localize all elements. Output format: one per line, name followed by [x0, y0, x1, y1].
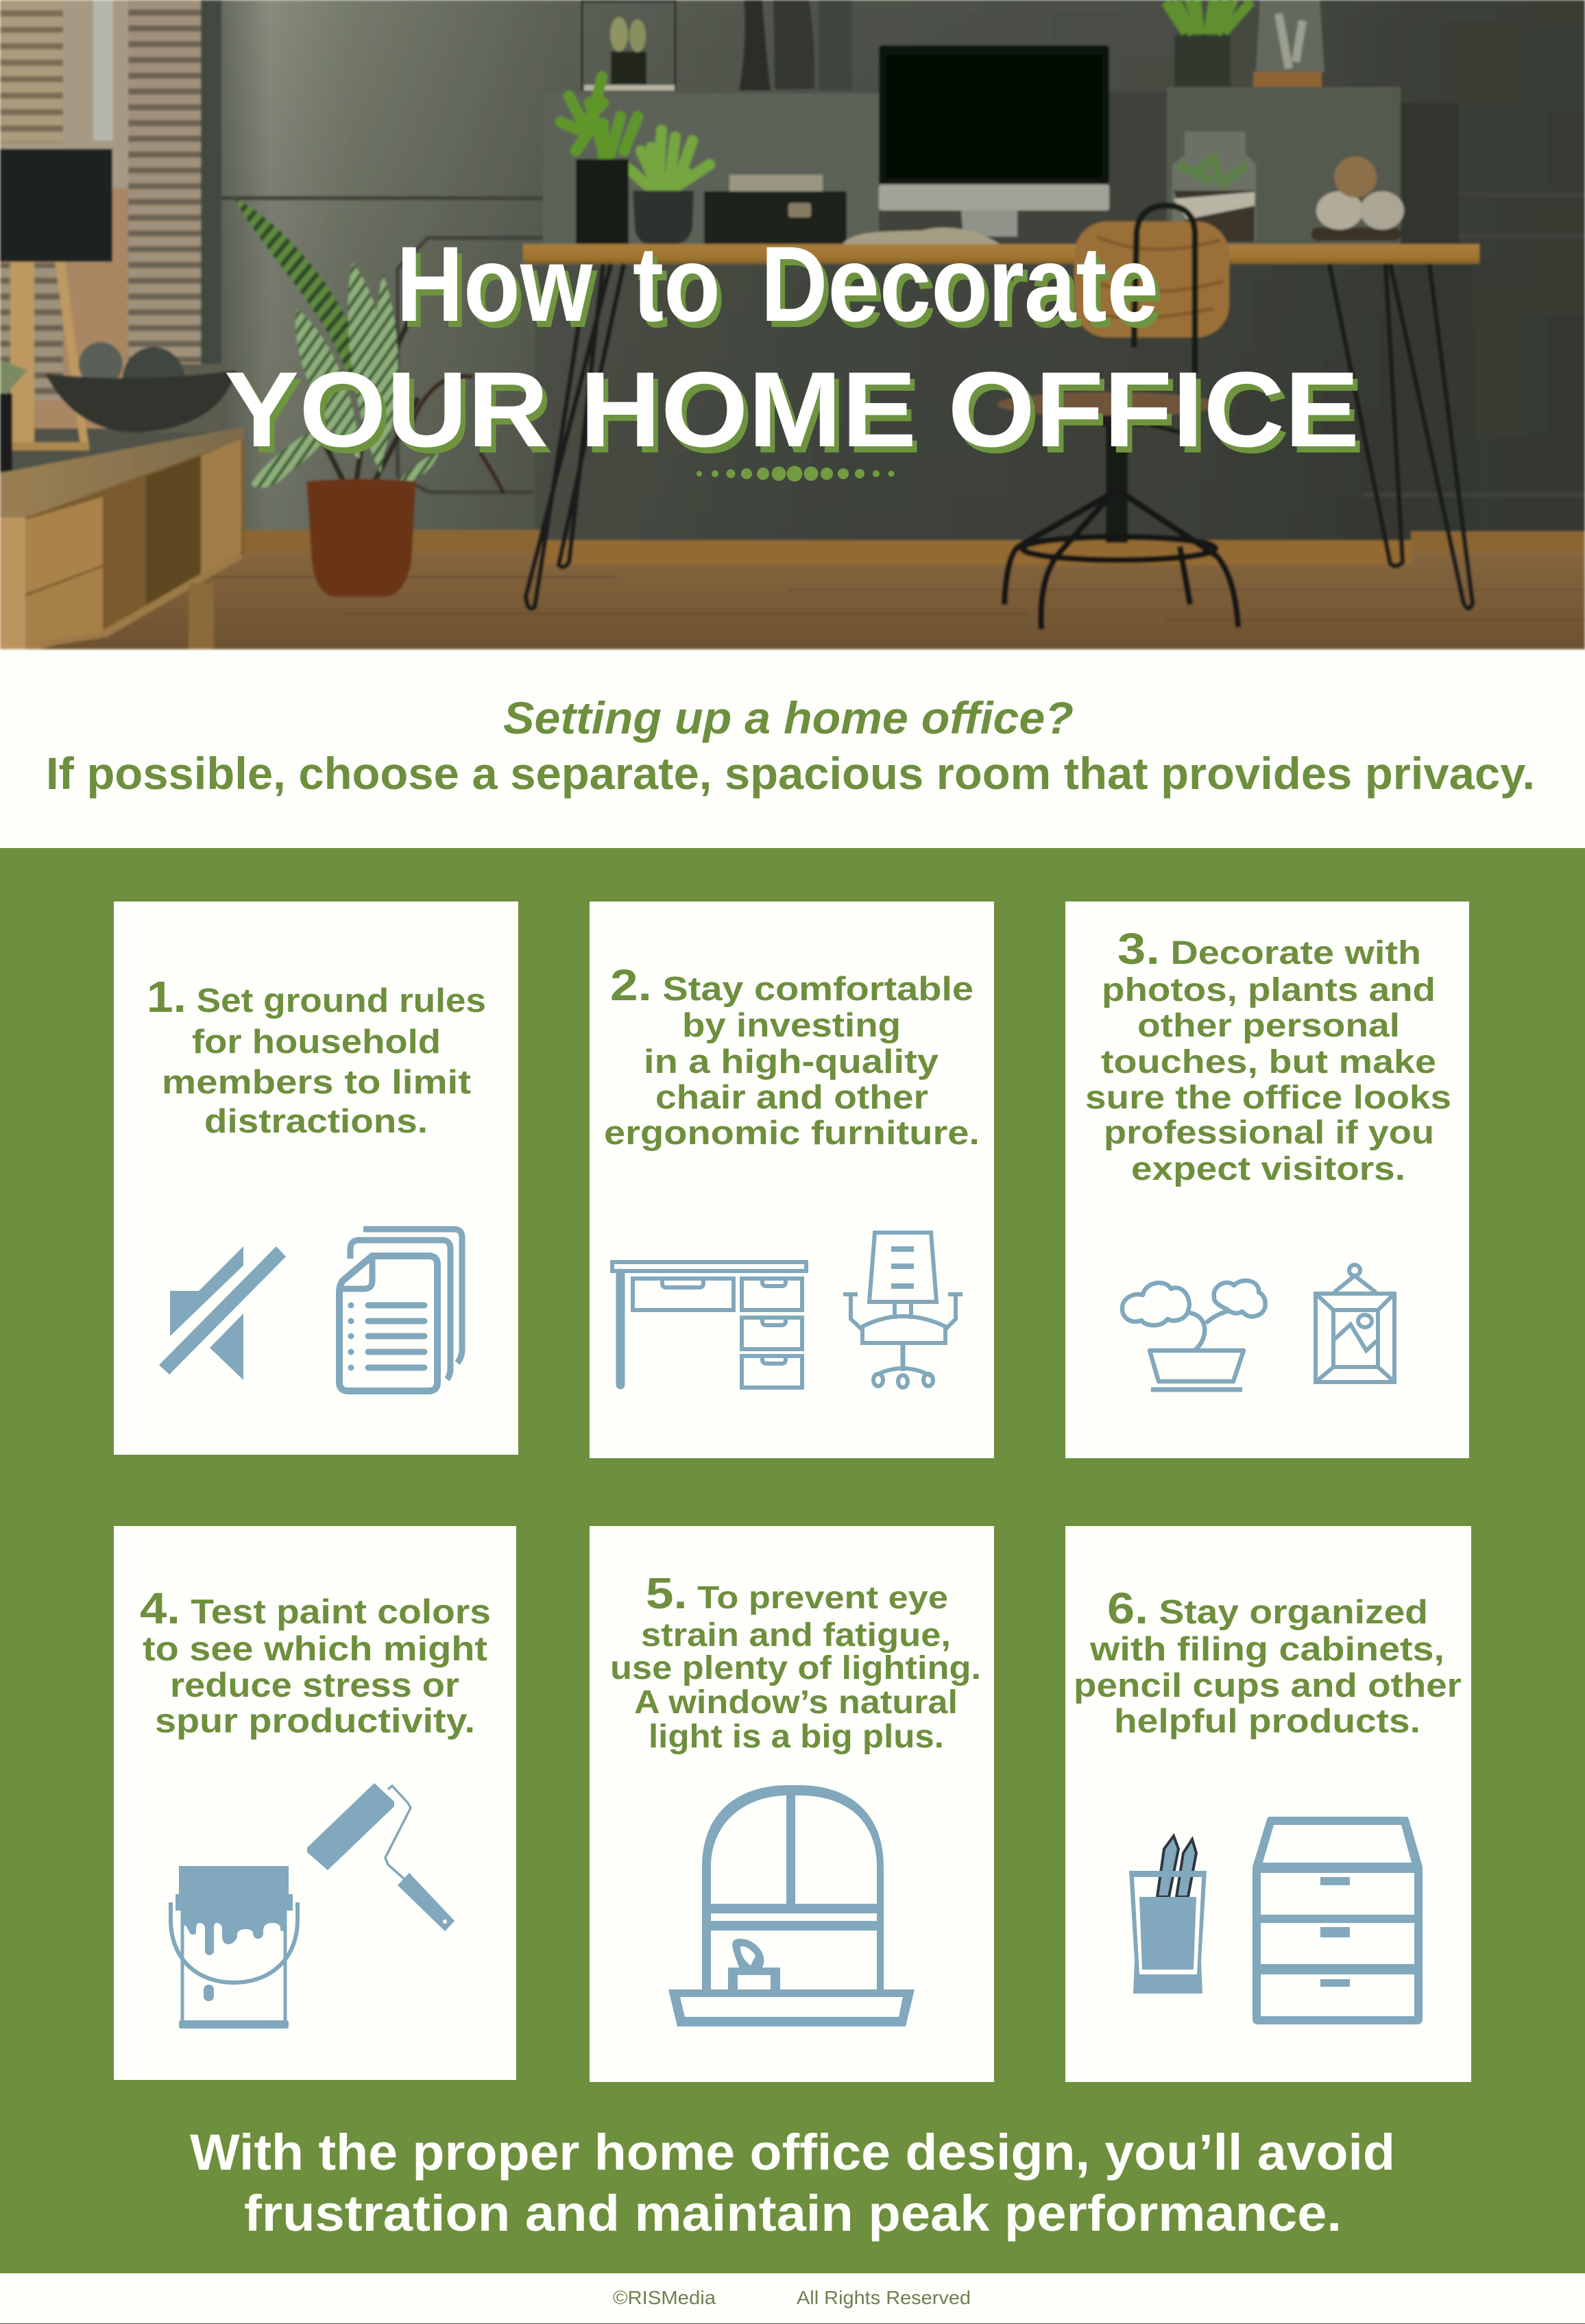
card 1: ground rules [114, 901, 518, 1455]
card 4 text: 4. Test paint colors [140, 1584, 491, 1633]
card 1 text: distractions. [204, 1103, 428, 1140]
card 4: paint colors [114, 1526, 516, 2080]
icon: paint can [171, 1866, 298, 2029]
card 5 text: A window’s natural [634, 1684, 958, 1721]
wooden sideboard [0, 426, 244, 649]
closing statement: frustration and maintain peak performance. [244, 2185, 1342, 2242]
card 5 text [610, 1569, 981, 1755]
card 4 text [140, 1584, 491, 1740]
title line one shadow: How to Decorate [401, 231, 1163, 350]
card 6 text: pencil cups and other [1074, 1667, 1462, 1704]
icon: paint roller [307, 1783, 455, 1931]
card 6: organization [1065, 1526, 1471, 2082]
floor plant terracotta pot [306, 479, 416, 597]
footer credits: ©RISMedia [613, 2287, 716, 2308]
footer credits [613, 2287, 971, 2308]
closing statement [190, 2124, 1395, 2242]
desk top [523, 244, 1479, 264]
wire basket with balls [0, 342, 237, 472]
hero photo: home office desk scene [0, 0, 1585, 649]
intro heading: Setting up a home office? [503, 692, 1074, 743]
card 3 text: photos, plants and [1102, 972, 1436, 1008]
wall mouldings [201, 195, 1585, 495]
card 3: personal touches [1065, 901, 1469, 1458]
floor and baseboards [0, 530, 1585, 649]
card 6 text: helpful products. [1114, 1703, 1420, 1740]
card 2 text: ergonomic furniture. [604, 1115, 980, 1152]
card 2 text [604, 960, 980, 1152]
icon: pencil cup [1129, 1836, 1207, 1994]
card 3 text: other personal [1137, 1008, 1400, 1044]
card 5: lighting [590, 1526, 994, 2082]
icon: bonsai tree [1122, 1281, 1266, 1390]
card 4 text: spur productivity. [155, 1702, 475, 1740]
card 3 text: sure the office looks [1085, 1080, 1451, 1116]
footer credits: All Rights Reserved [797, 2287, 971, 2308]
desk plants and pots [561, 77, 847, 244]
icon: filing cabinet [1253, 1817, 1423, 2024]
icon: office chair [843, 1233, 963, 1388]
intro sentence: If possible, choose a separate, spacious room that provides privacy. [46, 748, 1535, 799]
card 2 text: chair and other [655, 1079, 928, 1116]
card 3 text: touches, but make [1101, 1044, 1436, 1080]
card 3 text: expect visitors. [1131, 1151, 1405, 1187]
card 2 text: in a high-quality [644, 1043, 939, 1080]
icon: muted speaker [159, 1246, 286, 1380]
card 1 text: members to limit [162, 1064, 471, 1101]
card 3 text: professional if you [1104, 1115, 1434, 1151]
floor plant with leaves [233, 197, 504, 494]
card 5 text: light is a big plus. [649, 1719, 944, 1755]
card 5 text: use plenty of lighting. [610, 1650, 981, 1686]
jar and decorative balls [1172, 132, 1404, 242]
card 4 text: to see which might [143, 1630, 487, 1668]
card 5 text: strain and fatigue, [641, 1617, 951, 1654]
green tips section background [0, 848, 1585, 2273]
card 6 text [1074, 1584, 1462, 1740]
icon: desk with drawers [612, 1262, 806, 1388]
card 1 text [147, 972, 486, 1140]
table lamp [0, 149, 112, 450]
title line one: How to Decorate [396, 225, 1159, 344]
card 1 text: 1. Set ground rules [147, 972, 486, 1021]
top shelf decor [582, 0, 1324, 90]
computer monitor [842, 45, 1109, 245]
title: How to Decorate Your Home Office [224, 225, 1364, 476]
wall [0, 0, 1585, 569]
decorative dotted divider [697, 466, 894, 481]
card 5 text: 5. To prevent eye [646, 1569, 948, 1618]
title line two: YOUR HOME OFFICE [224, 350, 1359, 470]
card 2 text: by investing [682, 1007, 901, 1044]
left shelf blocks and wall units [543, 87, 1459, 247]
card 6 text: 6. Stay organized [1107, 1584, 1428, 1633]
chair with wooden back [997, 206, 1238, 629]
card 3 text: 3. Decorate with [1117, 924, 1421, 973]
icon: stack of documents [339, 1229, 462, 1391]
closing statement: With the proper home office design, you’ll avoid [190, 2124, 1395, 2181]
card 6 text: with filing cabinets, [1089, 1631, 1444, 1668]
card 2 text: 2. Stay comfortable [610, 960, 973, 1010]
card 2: comfortable furniture [590, 901, 994, 1458]
icon: arched window with plant [668, 1785, 915, 2026]
left window and blinds [0, 0, 221, 439]
icon: framed picture [1316, 1265, 1394, 1382]
card 3 text [1085, 924, 1451, 1187]
title line two shadow: YOUR HOME OFFICE [229, 356, 1364, 476]
card 4 text: reduce stress or [170, 1666, 459, 1704]
card 1 text: for household [192, 1024, 441, 1061]
desk hairpin legs [526, 264, 1473, 609]
